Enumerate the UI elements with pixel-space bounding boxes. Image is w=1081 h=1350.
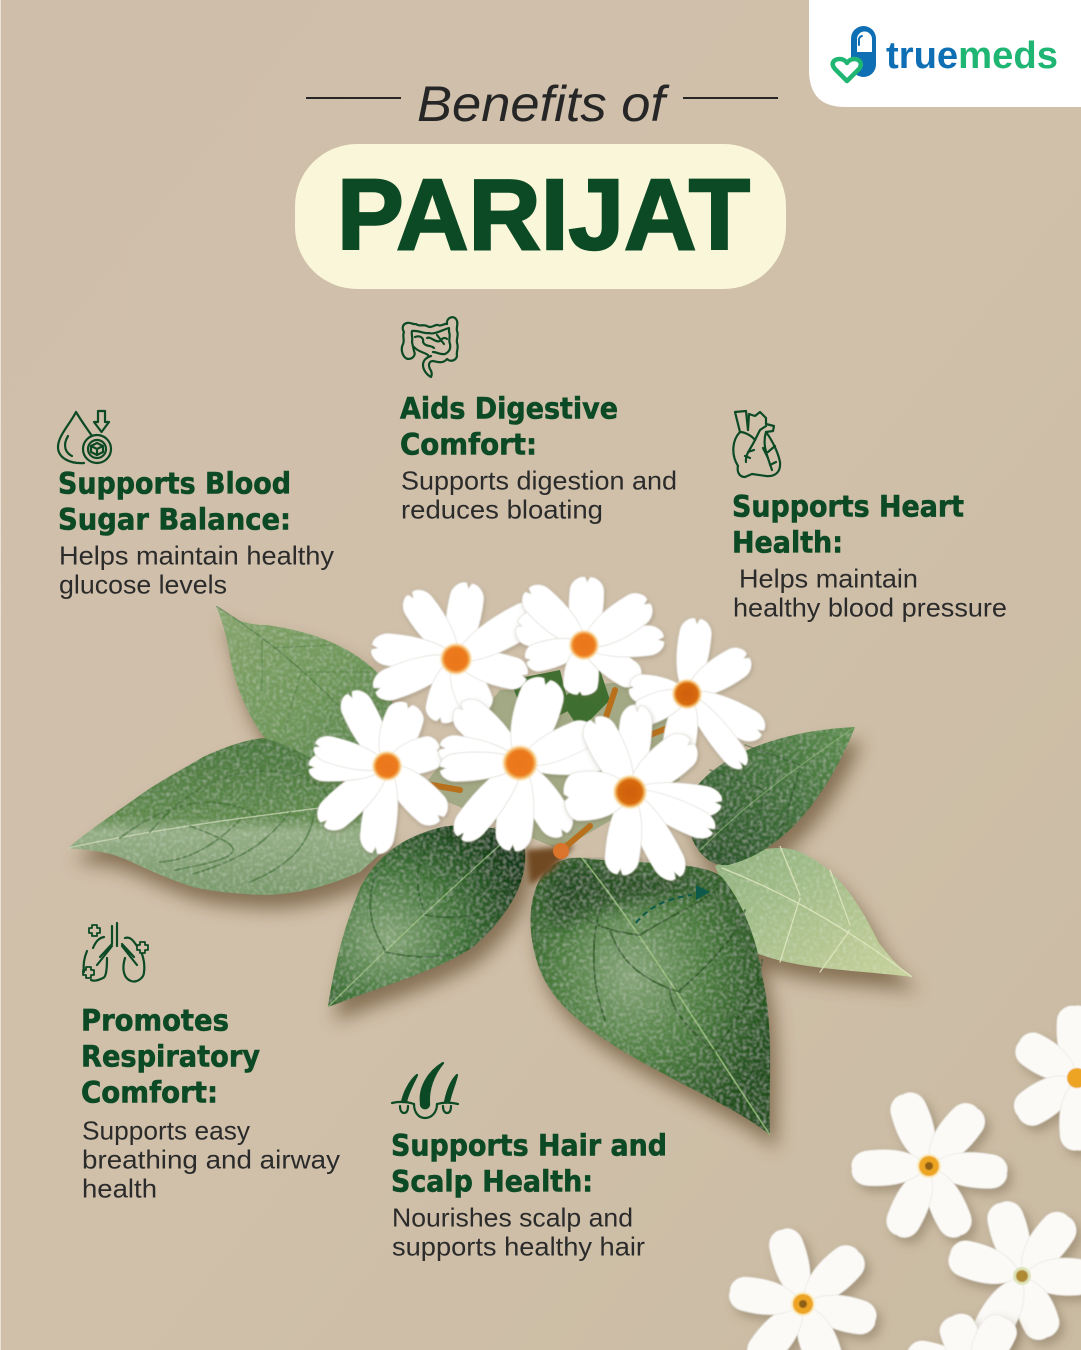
benefit: digestive: reduces bloating (401, 494, 603, 524)
leaf: right upper (687, 727, 855, 865)
benefit: hair (391, 1063, 667, 1262)
title: Benefits of: Benefits of (417, 76, 670, 132)
stray teal arrow mark (636, 885, 710, 923)
flower: top centre (512, 576, 665, 696)
flower: left (309, 685, 455, 856)
body text: Supports easy (82, 1116, 250, 1146)
title pill: PARIJAT (295, 144, 786, 289)
icon: blood drop with sugar cube (58, 411, 111, 463)
body text: Supports digestion and (401, 466, 677, 496)
benefit: hair: supports healthy hair (392, 1232, 645, 1262)
benefit: digestive: Comfort: (400, 428, 537, 462)
heading: Supports Heart (732, 490, 964, 524)
benefit: respiratory (81, 923, 340, 1204)
benefit: respiratory: health (82, 1174, 157, 1204)
heading: Supports Hair and (391, 1128, 667, 1162)
heading: Aids Digestive (400, 392, 618, 426)
flower: top left (369, 580, 549, 726)
icon: intestines (402, 317, 458, 377)
body text: Helps maintain healthy (59, 540, 334, 570)
leaf: bottom large (531, 858, 770, 1135)
leaf: right light (715, 846, 912, 977)
heading: Promotes (81, 1004, 229, 1038)
scattered flower: far right (1008, 1005, 1081, 1150)
flower: right centre (562, 704, 723, 886)
benefit: blood sugar (58, 411, 334, 600)
body text: Helps maintain (739, 564, 918, 594)
icon: lungs (83, 923, 148, 981)
leaf cluster (68, 606, 919, 1149)
benefit: digestive (400, 317, 677, 524)
body text: Nourishes scalp and (392, 1202, 633, 1232)
benefit: blood sugar: glucose levels (59, 570, 227, 600)
benefit: respiratory: Comfort: (81, 1076, 218, 1110)
flower: centre (437, 672, 609, 852)
benefit: blood sugar: Sugar Balance: (58, 502, 291, 536)
scattered flower: bottom (727, 1225, 879, 1350)
title pill: PARIJAT: PARIJAT (337, 159, 750, 271)
leaf: bottom centre left (328, 825, 525, 1007)
benefit: respiratory: breathing and airway (82, 1144, 340, 1174)
flower: top right (628, 616, 770, 774)
leaf: upper left (216, 606, 400, 780)
leaf: left large (68, 738, 390, 895)
leaf shadows (75, 620, 919, 1149)
benefit: heart: healthy blood pressure (733, 592, 1007, 622)
icon: anatomical heart (733, 411, 780, 477)
scattered flower: bottom edge (903, 1309, 1022, 1350)
benefit: heart: Health: (732, 526, 843, 560)
logo: truemeds (809, 0, 1081, 107)
icon: hair follicles (392, 1063, 458, 1118)
benefit: heart (732, 411, 1007, 622)
benefit: hair: Scalp Health: (391, 1164, 593, 1198)
heading: Supports Blood (58, 466, 291, 500)
scattered flower: middle right (851, 1088, 1009, 1243)
logo: truemeds: truemeds (886, 35, 1058, 77)
benefit: respiratory: Respiratory (81, 1040, 260, 1074)
stems behind flowers (415, 670, 680, 885)
scattered flower: bottom right (945, 1198, 1081, 1350)
